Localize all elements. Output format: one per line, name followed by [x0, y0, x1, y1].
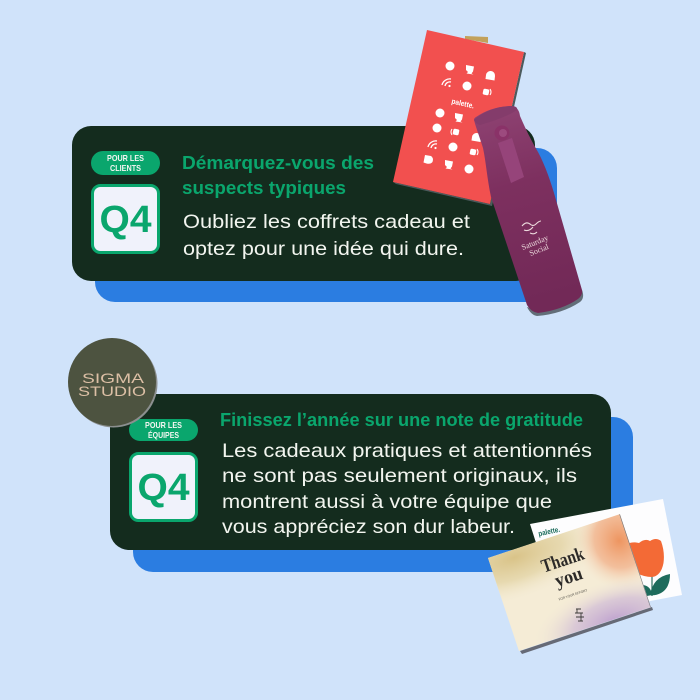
notebook: [393, 30, 526, 206]
bottle shadow: [527, 290, 583, 316]
thank you text: Thank: [539, 544, 587, 577]
text block: équipes: vous appréciez son dur labeur.: [222, 516, 515, 538]
tag: pour les clients: POUR LES: [107, 153, 144, 163]
heading: clients: Démarquez-vous des: [182, 152, 374, 173]
logo: Sigma Studio: SIGMA: [82, 370, 145, 386]
palette wordmark: palette.: [537, 525, 561, 538]
text block: clients: [183, 211, 471, 260]
notebook cover: [393, 30, 524, 204]
bottle body: [474, 106, 582, 313]
bottle logo: Social: [528, 242, 551, 258]
notebook icons: [424, 62, 495, 174]
blue backing card: équipes: [133, 417, 633, 572]
blue backing card: clients: [95, 148, 557, 302]
notebook icons: palette.: [451, 97, 475, 110]
caption: FOR YOUR EFFORT: [558, 588, 589, 602]
text block: équipes: Les cadeaux pratiques et attentionnés: [222, 440, 592, 462]
tag: pour les équipes: [129, 419, 198, 441]
badge: Q4 équipes: Q4: [138, 467, 190, 509]
text block: équipes: montrent aussi à votre équipe que: [222, 491, 552, 513]
white tulip card: [530, 499, 682, 618]
panel: équipes: [110, 394, 633, 572]
tag: pour les équipes: ÉQUIPES: [148, 430, 179, 440]
text block: équipes: ne sont pas seulement originaux, ils: [222, 465, 577, 487]
dark card: clients: [72, 126, 535, 281]
bottle strap: [494, 126, 524, 183]
logo: Sigma Studio: [68, 338, 158, 428]
thank you text: [539, 544, 587, 592]
tag: pour les clients: CLIENTS: [110, 163, 141, 173]
bottle logo: [520, 221, 551, 258]
notebook shadow: [393, 52, 526, 206]
logo: Sigma Studio: STUDIO: [78, 383, 146, 399]
badge: Q4 clients: [92, 186, 158, 252]
heading: équipes: Finissez l’année sur une note de gratitude: [220, 410, 583, 430]
bottle: [474, 106, 583, 316]
thank you text: you: [552, 563, 586, 592]
bottle cap top: [474, 106, 517, 125]
thank you card: [488, 514, 653, 654]
heading: clients: [182, 152, 374, 198]
card face: [488, 514, 651, 651]
heading: clients: suspects typiques: [182, 177, 346, 198]
text block: équipes: [222, 440, 592, 538]
badge: Q4 équipes: [130, 454, 196, 520]
text block: clients: optez pour une idée qui dure.: [183, 238, 464, 260]
dark card: équipes: [110, 394, 611, 550]
bottle logo: Saturday: [520, 233, 549, 252]
tulip card sheet: [530, 499, 682, 618]
card logo: [575, 609, 584, 621]
notebook tab: [465, 36, 488, 43]
card edge: [520, 607, 653, 654]
icon: tulip: [625, 539, 670, 596]
panel: clients: [72, 126, 557, 302]
text block: clients: Oubliez les coffrets cadeau et: [183, 211, 471, 233]
tag: pour les clients: [91, 151, 160, 175]
tag: pour les équipes: POUR LES: [145, 420, 182, 430]
badge: Q4 clients: Q4: [100, 199, 152, 241]
